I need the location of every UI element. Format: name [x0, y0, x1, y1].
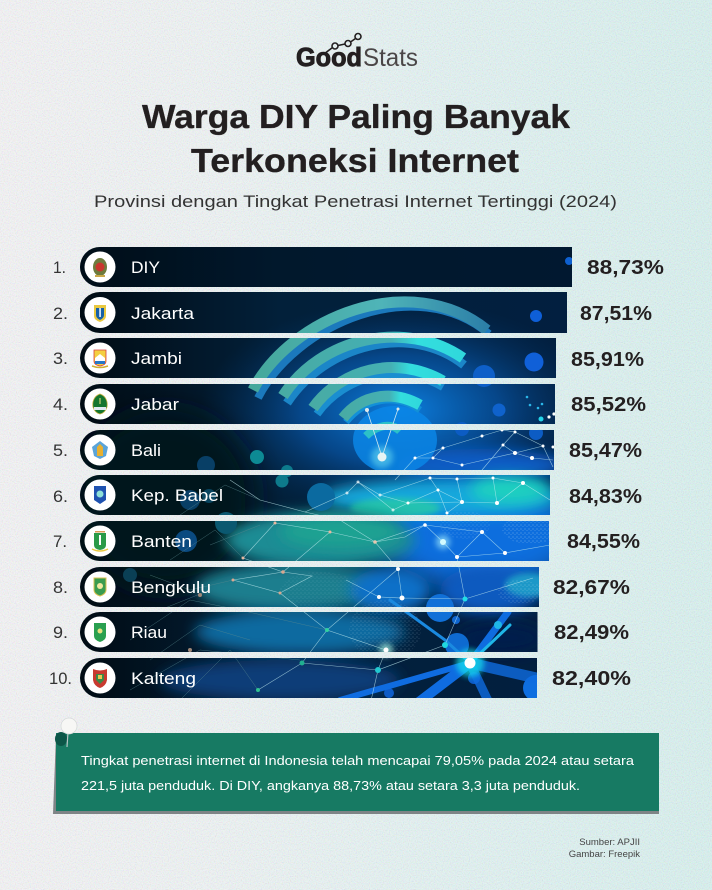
- row 6: Kep. Babel: [53, 480, 642, 510]
- callout text: 221,5 juta penduduk. Di DIY, angkanya 88,73% atau setara 3,3 juta penduduk.: [81, 778, 580, 793]
- blue dots: [123, 257, 573, 701]
- row 3: Jambi: Jambi: [131, 350, 182, 368]
- title: Warga DIY Paling Banyak: [142, 98, 571, 135]
- row 9: Riau: 9.: [53, 624, 68, 642]
- emblem: Banten: [92, 531, 108, 551]
- row 7: Banten: Banten: [131, 533, 192, 551]
- pin: [55, 718, 77, 747]
- faint left mesh: [130, 485, 327, 700]
- source credits: Gambar: Freepik: [569, 849, 640, 860]
- row 8: Bengkulu: [53, 572, 630, 602]
- emblem: Jabar: [93, 394, 107, 414]
- row 10: Kalteng: 10.: [49, 670, 72, 688]
- logo: GoodStats: [296, 34, 418, 72]
- row 3: Jambi: 85,91%: [571, 349, 644, 371]
- row 5: Bali: 5.: [53, 442, 68, 460]
- bars with wifi and network image: [75, 240, 600, 705]
- row 4: Jabar: [53, 388, 646, 420]
- callout panel: [53, 718, 659, 814]
- row 2: Jakarta: Jakarta: [131, 305, 195, 323]
- title: [142, 98, 571, 179]
- source credits: Sumber: APJII: [579, 837, 640, 848]
- row 1: DIY: DIY: [131, 259, 160, 277]
- wifi node: [365, 408, 400, 468]
- row 5: Bali: 85,47%: [569, 440, 642, 462]
- emblem: Kalteng: [93, 669, 107, 688]
- subtitle: Provinsi dengan Tingkat Penetrasi Internet Tertinggi (2024): [94, 193, 617, 211]
- row 9: Riau: Riau: [131, 624, 167, 642]
- row 6: Kep. Babel: 6.: [53, 488, 68, 506]
- source credits: [569, 837, 640, 860]
- emblem: DIY: [93, 258, 107, 277]
- globe: [160, 449, 580, 700]
- logo wordmark: Stats: [363, 44, 418, 72]
- row 8: Bengkulu: Bengkulu: [131, 579, 211, 597]
- emblem: Bali: [92, 441, 108, 459]
- callout text: [81, 753, 635, 793]
- row 6: Kep. Babel: 84,83%: [569, 486, 642, 508]
- row 3: Jambi: 3.: [53, 350, 68, 368]
- row 7: Banten: [53, 526, 640, 556]
- row 4: Jabar: 4.: [53, 396, 68, 414]
- row 4: Jabar: Jabar: [131, 396, 180, 414]
- row 1: DIY: [53, 252, 664, 282]
- emblem: Kep. Babel: [94, 486, 106, 504]
- row 7: Banten: 7.: [53, 533, 67, 551]
- logo chart line icon: [324, 34, 361, 54]
- callout text: Tingkat penetrasi internet di Indonesia telah mencapai 79,05% pada 2024 atau setara: [81, 753, 635, 768]
- logo wordmark: [296, 42, 418, 72]
- row 4: Jabar: 85,52%: [571, 394, 646, 416]
- emblem: Bengkulu: [94, 578, 106, 596]
- row 10: Kalteng: Kalteng: [131, 670, 196, 688]
- row 10: Kalteng: [49, 662, 631, 694]
- network nodes: [188, 428, 554, 692]
- emblem: Jambi: [92, 350, 108, 368]
- row 8: Bengkulu: 82,67%: [553, 577, 630, 599]
- row 5: Bali: Bali: [131, 442, 161, 460]
- row 5: Bali: [53, 434, 642, 466]
- bar chart: [49, 240, 664, 705]
- emblem: Riau: [94, 623, 106, 642]
- row 1: DIY: 88,73%: [587, 257, 664, 279]
- network mesh: [230, 430, 553, 705]
- wifi symbol: [253, 302, 489, 436]
- row 2: Jakarta: 2.: [53, 305, 68, 323]
- row 9: Riau: [53, 616, 629, 648]
- blue beams: [340, 600, 545, 705]
- row 3: Jambi: [53, 342, 644, 374]
- row 8: Bengkulu: 8.: [53, 579, 68, 597]
- row 9: Riau: 82,49%: [554, 622, 629, 644]
- logo wordmark: Good: [296, 42, 362, 72]
- row 10: Kalteng: 82,40%: [552, 668, 631, 690]
- row 2: Jakarta: [53, 297, 652, 328]
- row 7: Banten: 84,55%: [567, 531, 640, 553]
- row 6: Kep. Babel: Kep. Babel: [131, 487, 223, 505]
- row 1: DIY: 1.: [53, 259, 66, 277]
- emblem: Jakarta: [94, 305, 106, 322]
- central glow blob: [353, 406, 437, 474]
- title: Terkoneksi Internet: [191, 142, 519, 179]
- row 2: Jakarta: 87,51%: [580, 303, 652, 325]
